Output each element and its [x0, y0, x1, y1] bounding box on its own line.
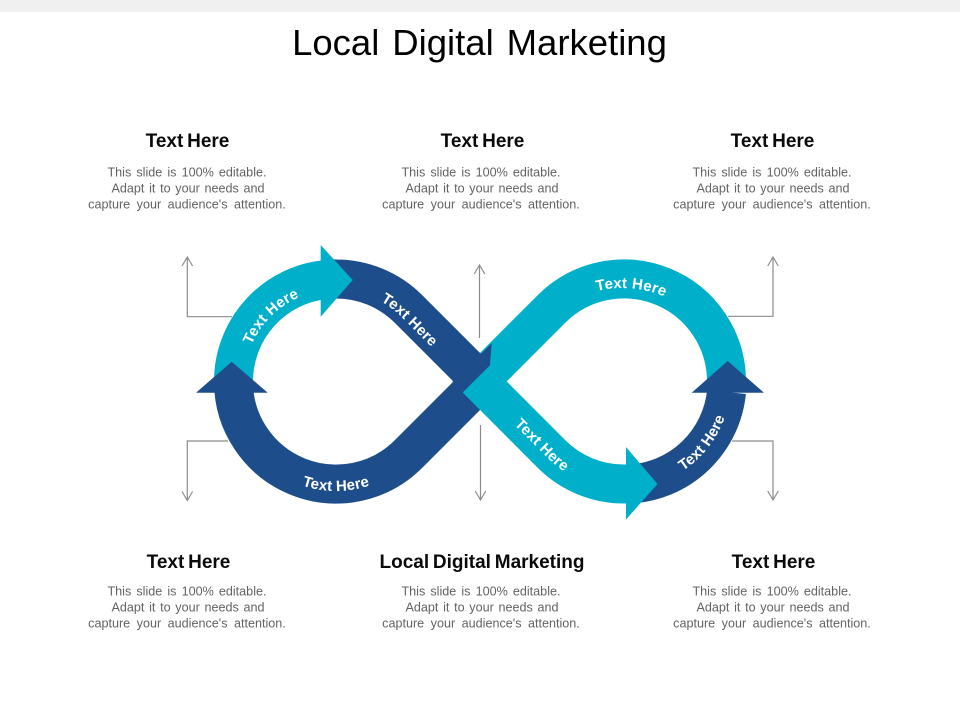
text block: top right	[673, 131, 871, 212]
text block: bottom centre: Local Digital Marketing	[380, 552, 584, 573]
text block: bottom centre: capture your audience's attention.	[382, 616, 580, 630]
text block: top centre: Text Here	[441, 131, 524, 152]
connector arrow: bottom left	[182, 441, 228, 500]
label: top right arc: Text Here	[594, 278, 666, 296]
text block: top left	[88, 131, 286, 212]
label: upper left diagonal: Text Here	[384, 292, 436, 346]
band: lower right dark	[630, 392, 726, 484]
text block: top right: capture your audience's attention.	[673, 198, 871, 212]
arrowhead: right dark	[692, 361, 764, 393]
text block: top centre: capture your audience's attention.	[382, 198, 580, 212]
text block: top left: This slide is 100% editable.	[107, 166, 267, 180]
title: Local Digital Marketing	[292, 22, 667, 63]
band: upper left dark with centre arrowhead	[325, 279, 492, 392]
label: upper left arc: Text Here	[242, 291, 298, 342]
text block: top left: capture your audience's attention.	[88, 198, 286, 212]
band: lower left dark	[234, 378, 485, 484]
label: bottom left arc: Text Here	[304, 476, 369, 492]
band: lower right cyan with arrowhead	[476, 379, 658, 520]
label: lower right arc: Text Here	[677, 416, 724, 469]
text block: bottom left	[88, 552, 286, 630]
text block: top left: Text Here	[146, 131, 229, 152]
text block: top right: Text Here	[731, 131, 814, 152]
text block: bottom right: This slide is 100% editable.	[692, 584, 852, 598]
text block: top centre	[382, 131, 580, 212]
connector arrow: top left	[182, 257, 232, 317]
connector arrow: top right	[728, 257, 778, 316]
band: upper right cyan	[480, 279, 726, 392]
connector arrow: bottom centre	[475, 425, 486, 500]
text block: bottom left: Text Here	[147, 552, 230, 573]
text block: bottom right: Text Here	[732, 552, 815, 573]
text block: bottom right: capture your audience's attention.	[673, 616, 871, 630]
text block: bottom left: capture your audience's attention.	[88, 616, 286, 630]
text block: bottom centre	[380, 552, 584, 630]
infinity diagram	[196, 245, 764, 520]
top strip	[0, 0, 960, 12]
text block: top left: Adapt it to your needs and	[111, 182, 265, 196]
text block: top right: Adapt it to your needs and	[696, 182, 850, 196]
text block: top right: This slide is 100% editable.	[692, 166, 852, 180]
text block: bottom right	[673, 552, 871, 630]
connector arrow: top centre	[474, 265, 485, 338]
text block: bottom right: Adapt it to your needs and	[696, 600, 850, 614]
arrowhead: left dark	[196, 362, 268, 393]
text block: bottom centre: This slide is 100% editable.	[401, 584, 561, 598]
band: upper left cyan with arrowhead	[234, 245, 353, 385]
text block: bottom centre: Adapt it to your needs and	[405, 600, 559, 614]
text block: bottom left: This slide is 100% editable.	[107, 584, 267, 598]
text block: bottom left: Adapt it to your needs and	[111, 600, 265, 614]
text block: top centre: Adapt it to your needs and	[405, 182, 559, 196]
text block: top centre: This slide is 100% editable.	[401, 166, 561, 180]
connector arrow: bottom right	[732, 441, 778, 500]
label: lower right diagonal: Text Here	[516, 417, 568, 470]
